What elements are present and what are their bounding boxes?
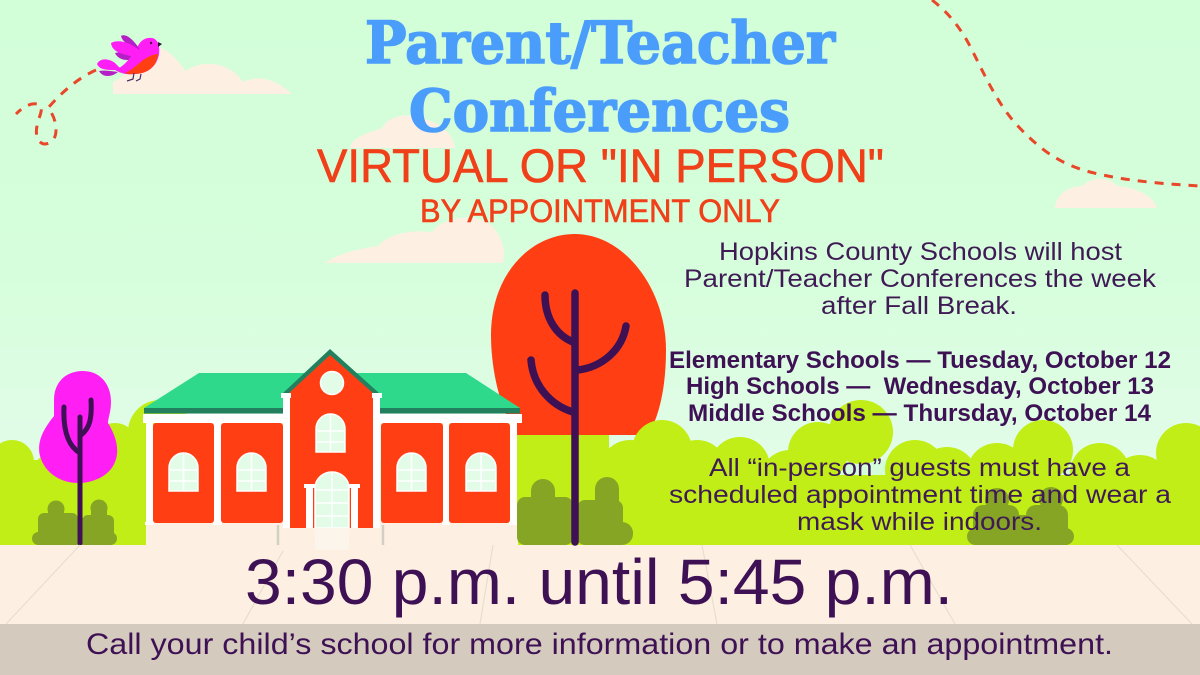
appointment note: mask while indoors. [797,508,1042,536]
intro text: Parent/Teacher Conferences the week [684,265,1157,293]
hedge: right [517,400,1200,545]
school base [146,520,518,545]
school roof [144,373,520,408]
cloud: behind title [350,115,455,148]
bush: left [32,500,117,545]
school pilasters [281,393,382,528]
grey side rails [278,525,383,545]
window muntins [169,414,496,528]
hedge: left [0,400,192,545]
cloud: top left [113,47,292,94]
intro text: Hopkins County Schools will host [719,238,1122,266]
redraw of magenta tree trunk [78,440,82,543]
cloud: behind subtitle [325,218,504,263]
background sky [0,0,1200,460]
time: 3:30 p.m. until 5:45 p.m. [245,546,953,618]
entrance steps [315,528,349,550]
schedule dates [669,347,1171,427]
clock window [320,372,344,394]
dashed flight path: top right [932,0,1200,186]
cloud: right [1055,179,1157,208]
footer band [0,624,1200,675]
tree trunk: large orange tree [531,293,626,542]
appointment note: All “in-person” guests must have a [709,454,1130,482]
school central gable [283,349,379,393]
school walls [153,423,510,523]
school columns [145,423,518,525]
school beam [143,414,522,423]
title [365,9,836,145]
appointment note [669,454,1171,536]
subtitle [317,139,884,229]
intro text [684,238,1157,320]
title: Parent/Teacher [365,9,836,77]
schedule dates: High Schools — Wednesday, October 13 [686,373,1154,400]
subtitle: BY APPOINTMENT ONLY [420,193,780,229]
appointment note: scheduled appointment time and wear a [669,481,1171,509]
ground [0,545,1200,625]
door columns [304,484,360,528]
bush: centre [517,477,633,545]
icon: bird [97,35,162,81]
schedule dates: Middle Schools — Thursday, October 14 [688,400,1152,427]
arched windows [169,414,496,528]
footer call to action: Call your child’s school for more information or to make an appointment. [86,628,1113,661]
tree: large orange [491,234,666,435]
schedule dates: Elementary Schools — Tuesday, October 12 [669,347,1171,374]
school building [143,349,522,550]
bush: right [967,487,1074,545]
dashed flight path: behind bird [16,70,96,144]
subtitle: VIRTUAL OR "IN PERSON" [317,139,884,192]
title: Conferences [409,77,790,145]
intro text: after Fall Break. [821,292,1017,320]
tree: magenta [39,371,117,543]
